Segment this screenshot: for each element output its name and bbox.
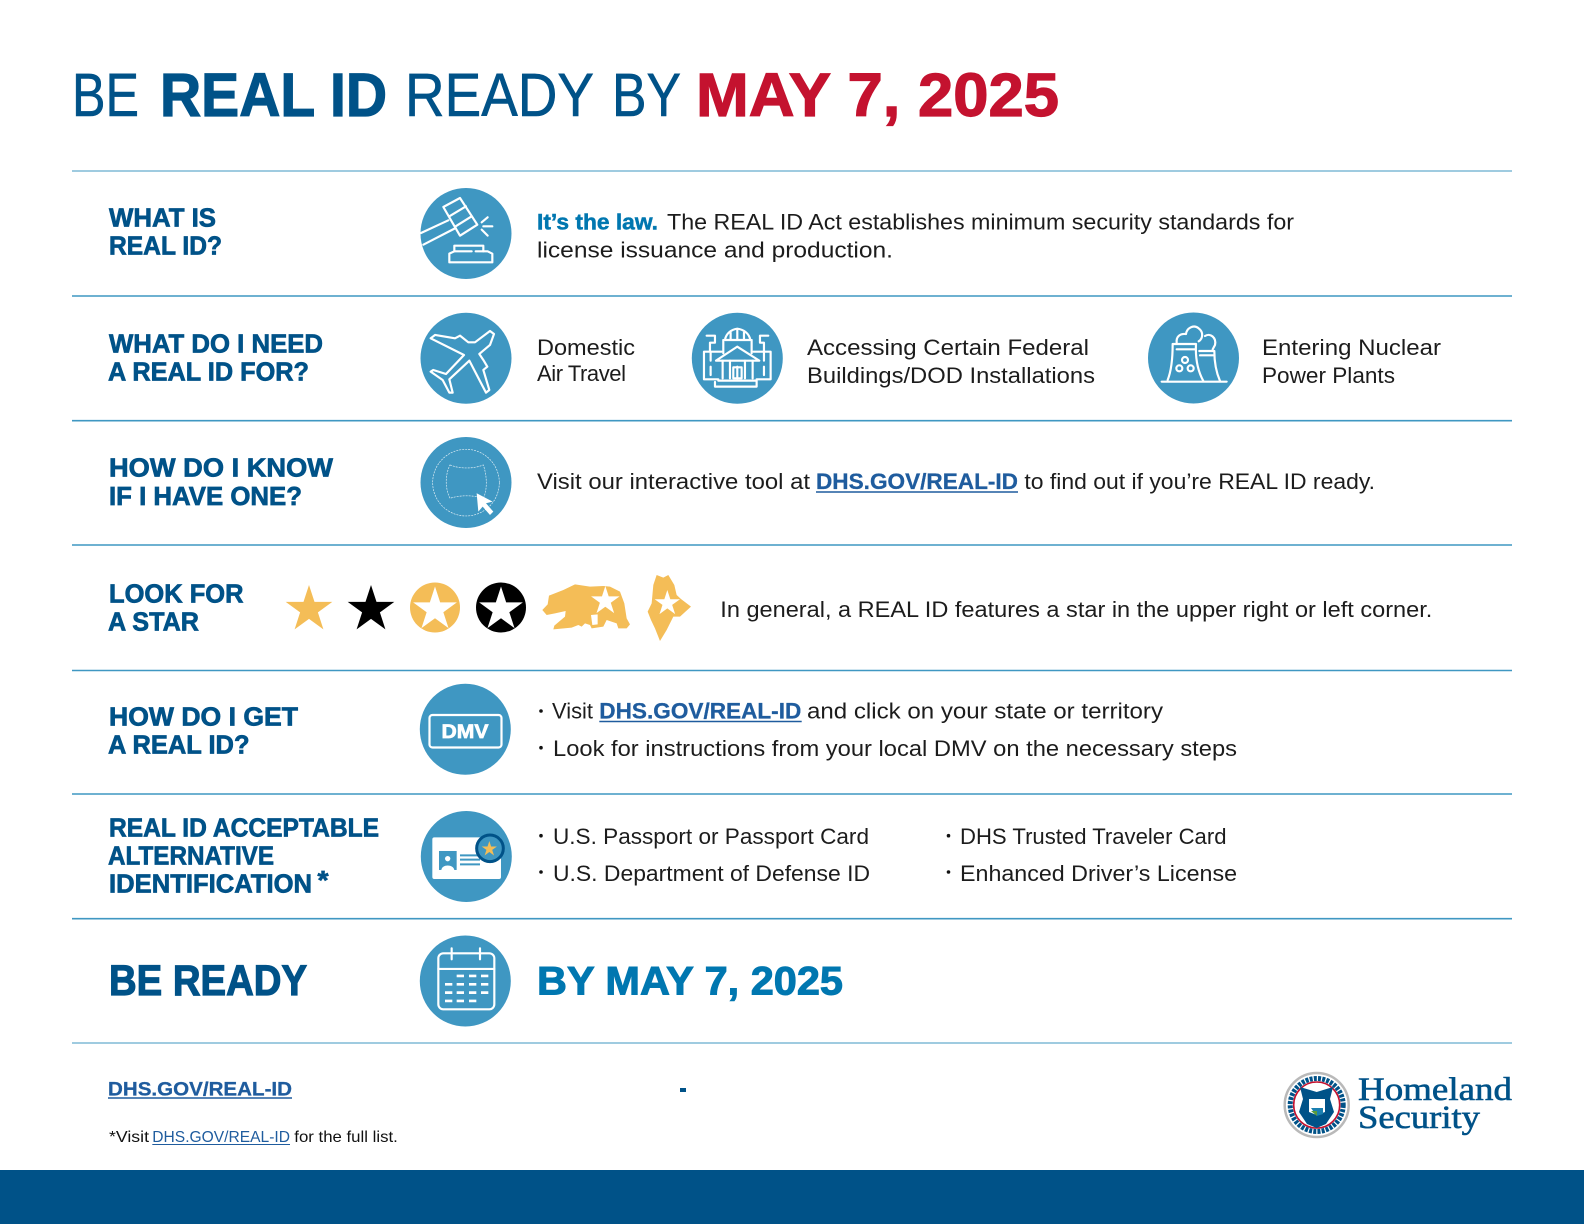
list: acceptable ids left (539, 824, 870, 886)
heading: what do i need: A REAL ID FOR? (108, 359, 309, 387)
heading: what is real id (109, 205, 222, 260)
list: steps: DHS.GOV/REAL-ID (599, 698, 801, 723)
heading: look for a star (108, 580, 244, 636)
icon: black circle star (476, 582, 526, 632)
heading: what do i need (108, 331, 323, 387)
text: the law: license issuance and production. (537, 237, 893, 262)
heading: alternative identification (108, 815, 379, 898)
list: steps: Visit (552, 698, 593, 723)
icon: nuclear plant (1148, 312, 1239, 404)
wordmark (1358, 1072, 1513, 1136)
wordmark: Security (1358, 1100, 1481, 1136)
text: federal buildings: Accessing Certain Federal (807, 335, 1089, 360)
heading: be ready: BE READY (109, 957, 307, 1005)
text: federal buildings (807, 335, 1095, 388)
heading: alternative identification: REAL ID ACCEPTABLE (109, 815, 379, 843)
title: MAY 7, 2025 (696, 61, 1059, 130)
icon: airplane (420, 313, 512, 404)
heading: alternative identification: IDENTIFICATION (109, 870, 312, 898)
text: interactive tool: to find out if you’re REAL ID ready. (1024, 469, 1375, 494)
text: the law: The REAL ID Act establishes minimum security standards for (667, 209, 1294, 234)
heading: alternative identification: ALTERNATIVE (108, 843, 274, 871)
footnote (109, 1129, 398, 1146)
icon: id card (421, 811, 512, 902)
wordmark: Homeland (1358, 1072, 1513, 1108)
text: the law: It’s the law. (537, 209, 658, 234)
icon: dhs seal (1284, 1072, 1350, 1138)
heading: what is real id: WHAT IS (109, 205, 216, 233)
heading: how do i know (109, 455, 334, 511)
footnote: *Visit (109, 1129, 150, 1146)
icon: california bear star (542, 584, 630, 629)
list: acceptable ids right: Enhanced Driver’s License (960, 861, 1237, 886)
title: BY (612, 61, 681, 130)
title (72, 61, 1059, 130)
title: BE (72, 61, 139, 130)
text: interactive tool: Visit our interactive tool at (537, 469, 810, 494)
text: federal buildings: Buildings/DOD Installations (807, 363, 1095, 388)
list: steps: Look for instructions from your local DMV on the necessary steps (553, 736, 1237, 761)
list: acceptable ids left: U.S. Department of Defense ID (553, 861, 870, 886)
heading: what do i need: WHAT DO I NEED (109, 331, 323, 359)
list: acceptable ids left: U.S. Passport or Passport Card (553, 824, 869, 849)
text: interactive tool: DHS.GOV/REAL-ID (816, 469, 1018, 494)
text: nuclear plants: Power Plants (1262, 363, 1395, 388)
text: nuclear plants: Entering Nuclear (1262, 335, 1441, 360)
heading: alternative identification: * (318, 867, 329, 895)
panel: alternative identification (108, 811, 1237, 902)
heading: how do i get: HOW DO I GET (109, 704, 298, 732)
heading: how do i get: A REAL ID? (108, 732, 250, 760)
heading: how do i get (108, 704, 298, 760)
title: REAL ID (160, 61, 387, 130)
panel: what is real id (109, 188, 1294, 279)
icon: dmv: DMV (442, 722, 489, 743)
icon: gavel (420, 188, 512, 279)
icon: black star (348, 585, 394, 629)
icon: globe cursor (420, 437, 512, 528)
panel: how do i know (109, 437, 1375, 528)
footnote: for the full list. (294, 1129, 398, 1146)
heading: how do i know: HOW DO I KNOW (109, 455, 334, 483)
panel: how do i get (108, 684, 1237, 775)
text: domestic air travel (537, 335, 635, 386)
text: star description: In general, a REAL ID features a star in the upper right or left corner. (720, 597, 1432, 622)
footer link: DHS.GOV/REAL-ID (108, 1079, 292, 1101)
text: domestic air travel: Air Travel (537, 361, 626, 386)
icon: calendar (420, 936, 511, 1026)
panel: be ready (109, 936, 843, 1026)
panel: what do i need a real id for (108, 312, 1441, 404)
icon: dmv (420, 684, 511, 775)
footer bar (0, 1170, 1584, 1224)
text: domestic air travel: Domestic (537, 335, 635, 360)
heading: what is real id: REAL ID? (109, 232, 222, 260)
text: by may 7 2025: BY MAY 7, 2025 (537, 959, 843, 1003)
list: acceptable ids right (947, 824, 1237, 886)
logo: homeland security (1284, 1072, 1513, 1138)
title: READY (405, 61, 594, 130)
heading: look for a star: A STAR (108, 608, 199, 636)
text: nuclear plants (1262, 335, 1441, 388)
heading: look for a star: LOOK FOR (109, 580, 244, 608)
icon: gold star (286, 585, 332, 629)
icon: federal building (692, 313, 783, 404)
footnote: DHS.GOV/REAL-ID (152, 1129, 290, 1146)
list: acceptable ids right: DHS Trusted Traveler Card (960, 824, 1226, 849)
panel: look for a star (108, 575, 1432, 641)
heading: how do i know: IF I HAVE ONE? (109, 483, 302, 511)
list: steps (539, 698, 1237, 761)
list: steps: and click on your state or territory (807, 698, 1163, 723)
icon: gold circle star (410, 582, 460, 632)
icon: maine star (648, 575, 691, 641)
text: interactive tool (537, 469, 1375, 494)
text: the law (537, 209, 1294, 262)
